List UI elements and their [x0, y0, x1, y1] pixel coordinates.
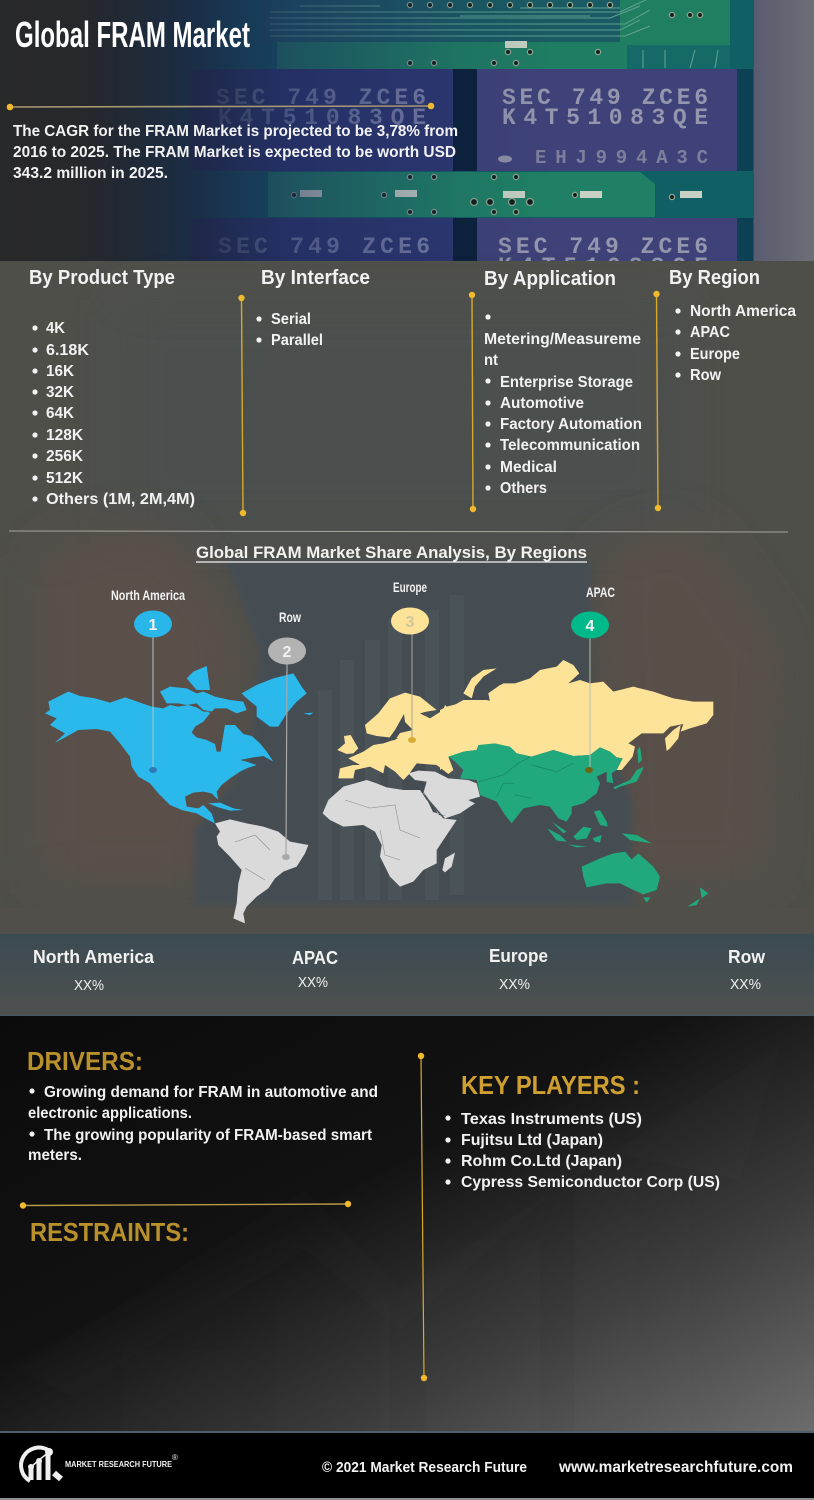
panel: regional shares band: XX% — [298, 974, 328, 991]
callout: apac marker — [571, 584, 615, 773]
panel: by application: Telecommunication — [500, 437, 640, 454]
callout: north america marker — [111, 587, 185, 773]
divider: drivers / restraints — [20, 1201, 351, 1209]
panel: hero background circuit board — [0, 0, 814, 280]
panel: regional shares band: XX% — [74, 977, 104, 994]
panel: key players: Cypress Semiconductor Corp (US) — [461, 1174, 720, 1191]
panel: regional shares band: APAC — [292, 948, 338, 968]
panel: by region: By Region — [669, 267, 760, 289]
footer: ® — [172, 1453, 178, 1462]
panel: by application — [484, 268, 642, 497]
panel: by application: Others — [500, 480, 547, 497]
panel: hero background circuit board: K4T51083QE — [498, 254, 708, 280]
panel: drivers, restraints and key players background — [0, 1014, 814, 1431]
panel: regional shares band: Europe — [489, 946, 548, 966]
panel: by region — [669, 267, 796, 384]
heading: regional share analysis: Global FRAM Market Share Analysis, By Regions — [196, 543, 587, 562]
panel: by product type: 32K — [46, 384, 75, 401]
panel: by interface: Parallel — [271, 332, 323, 349]
panel: regional shares band — [0, 934, 814, 1012]
footer — [0, 1431, 814, 1500]
panel: by product type: 4K — [46, 320, 66, 337]
divider: application / region — [653, 291, 661, 511]
footer: MARKET RESEARCH FUTURE — [65, 1460, 173, 1469]
footer: www.marketresearchfuture.com — [558, 1459, 793, 1476]
region: africa, middle east and south america — [215, 771, 480, 923]
panel: drivers: The growing popularity of FRAM-based smart — [44, 1127, 372, 1144]
panel: by application: nt — [484, 352, 498, 369]
heading: restraints: RESTRAINTS: — [30, 1217, 189, 1247]
panel: by application: Metering/Measureme — [484, 331, 641, 348]
panel: regional shares band: Row — [728, 947, 766, 967]
callout: apac marker: APAC — [586, 584, 615, 600]
panel: hero background circuit board: SEC 749 ZCE6 — [502, 85, 708, 111]
panel: by product type: By Product Type — [29, 267, 175, 289]
callout: north america marker: North America — [111, 587, 185, 603]
panel: by application: Automotive — [500, 395, 584, 412]
callout: north america marker: 1 — [149, 617, 158, 634]
panel: drivers: DRIVERS: — [27, 1046, 143, 1076]
panel: hero background circuit board: SEC 749 ZCE6 — [216, 85, 426, 111]
panel: key players: Rohm Co.Ltd (Japan) — [461, 1153, 622, 1170]
panel: hero background circuit board: EHJ994A3C — [535, 147, 708, 169]
panel: by application: Enterprise Storage — [500, 374, 633, 391]
panel: hero background circuit board: SEC 749 ZCE6 — [498, 234, 708, 260]
chart: world map by region — [45, 579, 713, 923]
panel: by region: Row — [690, 367, 722, 384]
heading: title: Global FRAM Market — [15, 14, 250, 55]
panel: by product type: 64K — [46, 405, 75, 422]
panel: by application: Factory Automation — [500, 416, 642, 433]
callout: row marker: Row — [279, 609, 301, 625]
panel: by product type: 6.18K — [46, 342, 90, 359]
panel: hero background circuit board: K4T51083QE — [502, 105, 708, 131]
panel: key players: Texas Instruments (US) — [461, 1111, 642, 1128]
panel: by interface: Serial — [271, 311, 311, 328]
callout: row marker: 2 — [283, 644, 292, 661]
panel: drivers: Growing demand for FRAM in automotive and — [44, 1084, 378, 1101]
panel: by product type: 128K — [46, 427, 84, 444]
panel: by region: North America — [690, 303, 796, 320]
region: north america — [45, 666, 313, 823]
panel: by region: Europe — [690, 346, 740, 363]
panel: by application: Medical — [500, 459, 557, 476]
panel: key players: KEY PLAYERS : — [461, 1070, 640, 1100]
panel: by region: APAC — [690, 324, 730, 341]
divider: drivers / key players — [418, 1053, 427, 1381]
divider: hero gold line — [7, 103, 434, 110]
footer: © 2021 Market Research Future — [322, 1459, 527, 1476]
panel: by product type: Others (1M, 2M,4M) — [46, 491, 195, 508]
callout: europe marker: Europe — [393, 579, 427, 595]
panel: by product type: 512K — [46, 470, 84, 487]
region: asia pacific — [448, 743, 708, 907]
callout: apac marker: 4 — [586, 618, 595, 635]
panel: by interface — [256, 267, 370, 349]
text block: market summary — [13, 123, 458, 182]
panel: market segments and map background — [0, 261, 814, 1015]
callout: row marker — [268, 609, 306, 860]
text block: market summary: 343.2 million in 2025. — [13, 165, 168, 182]
panel: drivers: electronic applications. — [28, 1105, 192, 1122]
panel: by product type — [29, 267, 195, 508]
panel: by product type: 16K — [46, 363, 75, 380]
divider: interface / application — [469, 292, 476, 512]
region: europe and russia — [337, 660, 713, 780]
panel: hero background circuit board: SEC 749 ZCE6 — [218, 234, 430, 260]
panel: by application: By Application — [484, 268, 616, 290]
callout: europe marker — [391, 579, 429, 743]
panel: regional shares band: XX% — [499, 976, 530, 993]
panel: key players — [445, 1070, 720, 1191]
panel: drivers: meters. — [28, 1147, 82, 1164]
divider: product type / interface — [238, 295, 246, 516]
panel: hero background circuit board: K4T51083QE — [218, 105, 426, 131]
panel: by interface: By Interface — [261, 267, 370, 289]
panel: drivers — [27, 1046, 378, 1164]
panel: by product type: 256K — [46, 448, 84, 465]
text block: market summary: The CAGR for the FRAM Market is projected to be 3,78% from — [13, 123, 458, 140]
icon: market research future logo — [21, 1448, 61, 1481]
panel: regional shares band: North America — [33, 947, 155, 967]
text block: market summary: 2016 to 2025. The FRAM Market is expected to be worth USD — [13, 144, 456, 161]
panel: key players: Fujitsu Ltd (Japan) — [461, 1132, 603, 1149]
panel: regional shares band: XX% — [730, 976, 761, 993]
callout: europe marker: 3 — [406, 614, 415, 631]
